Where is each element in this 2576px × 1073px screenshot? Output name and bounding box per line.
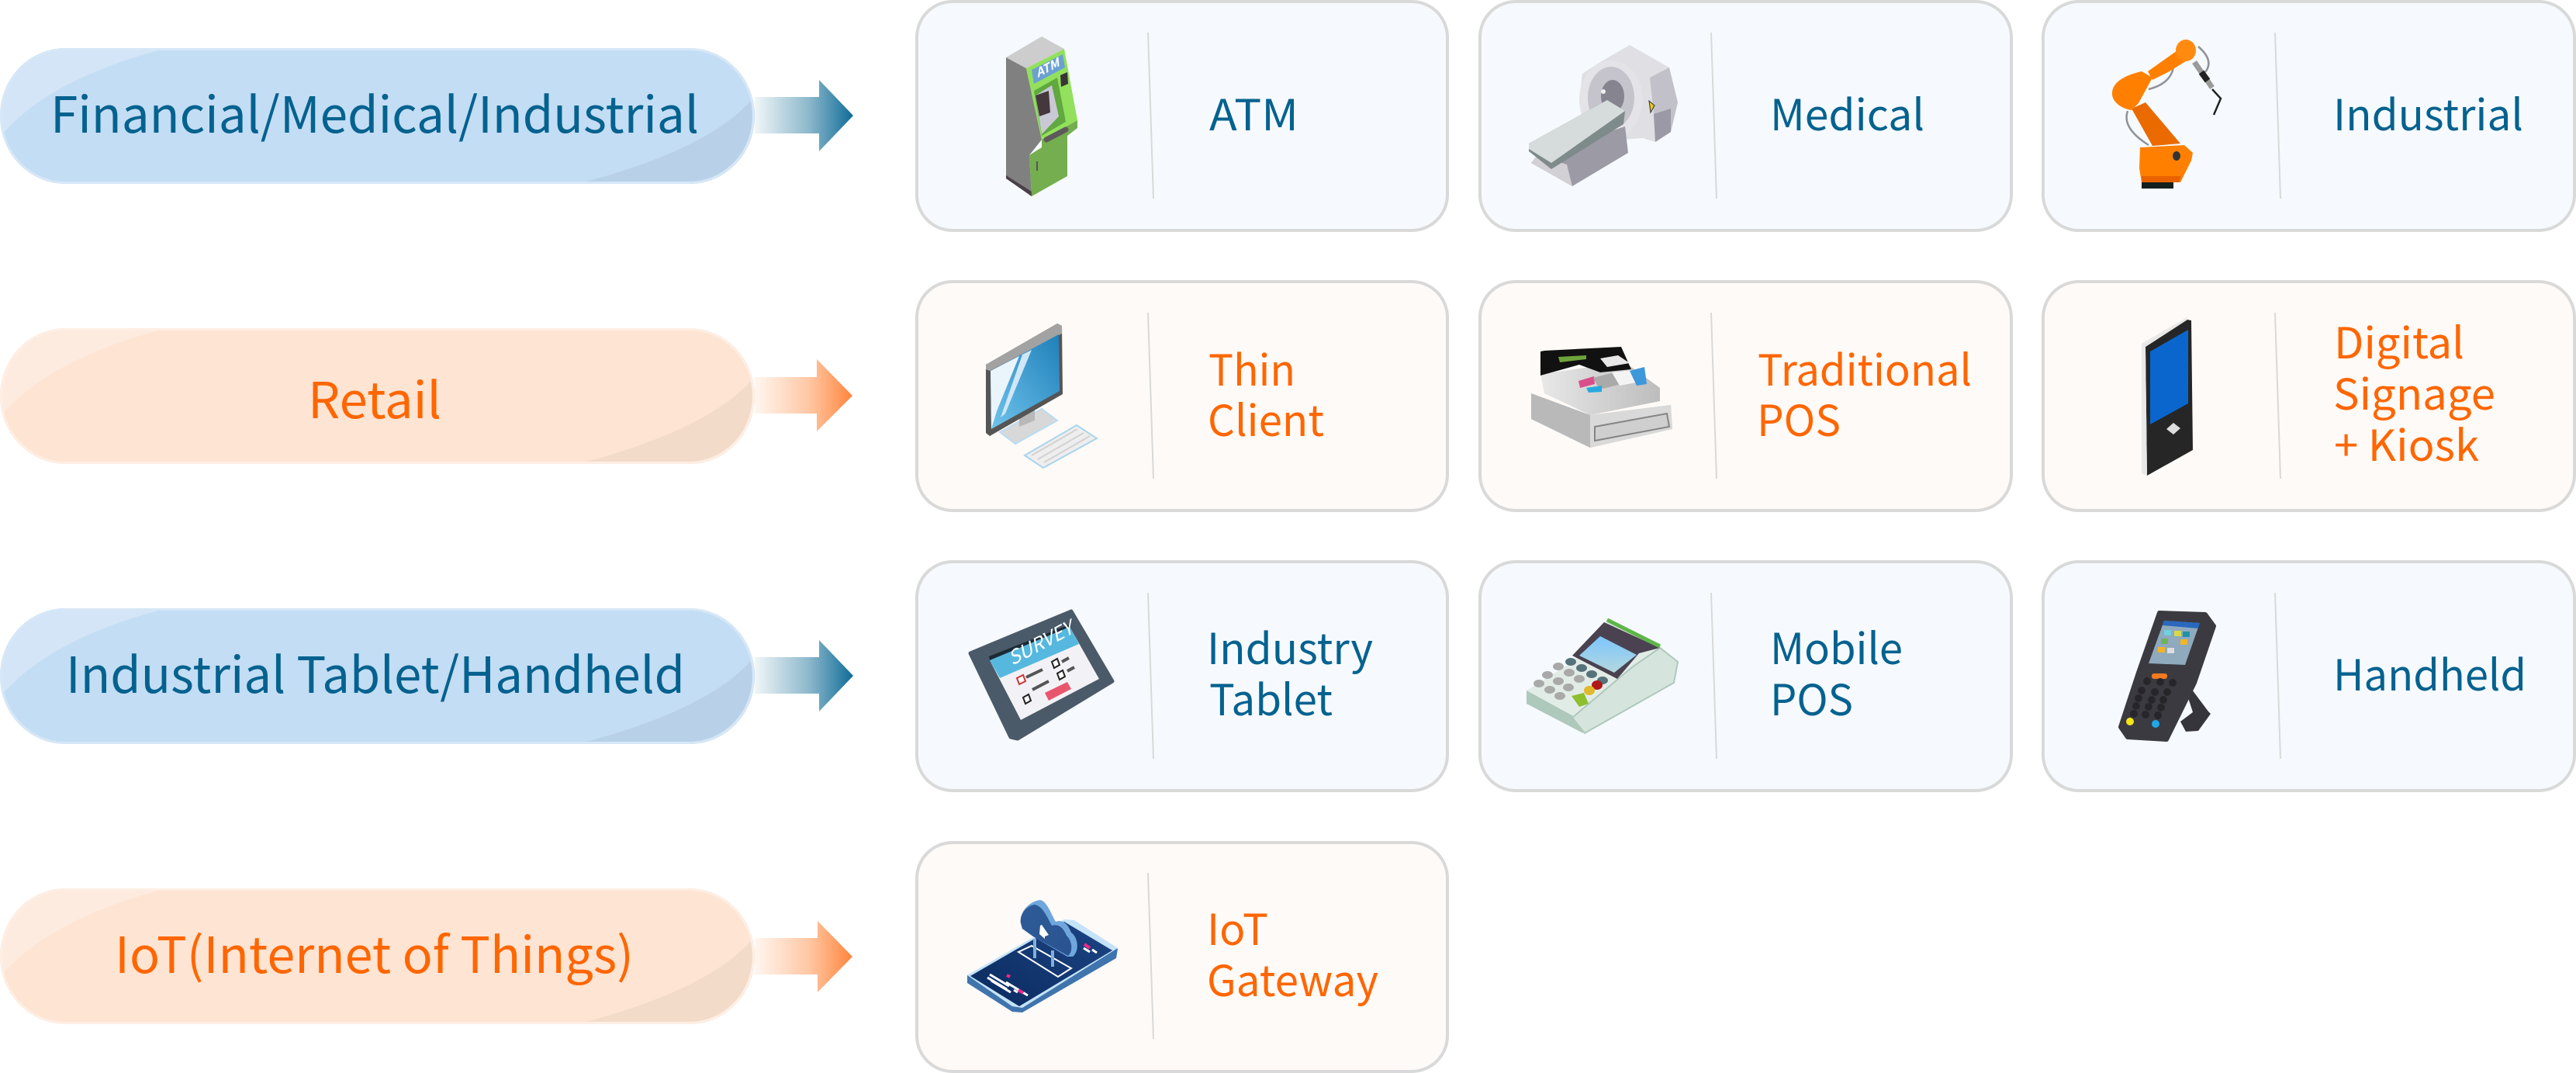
category pill: Industrial Tablet/Handheld: Industrial Tablet/Handheld <box>66 636 685 708</box>
category pill: Financial/Medical/Industrial <box>0 48 755 184</box>
arrow: row 2 <box>755 359 852 431</box>
label: Mobile POS <box>1770 614 1903 728</box>
arrow: row 4 <box>755 921 852 992</box>
icon: survey tablet <box>970 611 1112 739</box>
category pill: Retail: Retail <box>308 362 441 433</box>
card: Mobile POS <box>1480 562 2011 791</box>
card: Thin Client <box>917 282 1447 511</box>
category pill: IoT(Internet of Things) <box>0 888 755 1024</box>
label: Digital Signage + Kiosk <box>2333 309 2495 473</box>
arrow: row 3 <box>755 640 853 711</box>
category pill: Retail <box>0 328 755 464</box>
label: IoT Gateway <box>1207 895 1378 1009</box>
icon: mobile POS terminal <box>1527 620 1678 733</box>
label: Mobile POS: POS <box>1770 666 1853 728</box>
label: Industry Tablet <box>1207 614 1373 728</box>
label: Traditional POS <box>1757 336 1972 448</box>
category pill: IoT(Internet of Things): IoT(Internet of Things) <box>115 916 634 988</box>
label: Thin Client: Client <box>1208 386 1324 448</box>
category pill: Financial/Medical/Industrial: Financial/Medical/Industrial <box>50 76 699 147</box>
label: Digital Signage + Kiosk: + Kiosk <box>2334 411 2479 473</box>
card: Industry Tablet <box>917 562 1447 791</box>
label: Digital Signage + Kiosk: Signage <box>2333 360 2495 422</box>
icon: cash register <box>1531 347 1672 448</box>
label: Traditional POS: POS <box>1757 386 1841 448</box>
label: Thin Client <box>1208 336 1324 448</box>
card: ATM <box>917 2 1447 230</box>
card: Traditional POS <box>1480 282 2011 511</box>
label: Traditional POS: Traditional <box>1758 336 1972 398</box>
card: Industrial: Industrial <box>2333 81 2523 143</box>
icon: ATM machine <box>1006 36 1077 196</box>
label: Digital Signage + Kiosk: Digital <box>2334 309 2464 371</box>
label: IoT Gateway: IoT <box>1207 895 1268 957</box>
arrow: row 1 <box>755 80 853 151</box>
label: Mobile POS: Mobile <box>1770 614 1903 677</box>
icon: ATM machine: ATM <box>1036 51 1060 81</box>
icon: robot arm <box>2112 40 2221 189</box>
card: ATM: ATM <box>1209 81 1298 143</box>
card: Medical <box>1480 2 2011 230</box>
card: Digital Signage + Kiosk <box>2043 282 2574 511</box>
icon: kiosk <box>2142 317 2193 476</box>
icon: survey tablet: SURVEY <box>1008 611 1076 672</box>
icon: CT scanner <box>1529 45 1678 186</box>
label: IoT Gateway: Gateway <box>1207 947 1378 1009</box>
icon: handheld scanner <box>2121 613 2214 739</box>
card: IoT Gateway <box>917 843 1447 1071</box>
card: Industrial <box>2043 2 2574 230</box>
card: Medical: Medical <box>1770 81 1924 143</box>
card: Handheld <box>2043 562 2574 791</box>
card: Handheld: Handheld <box>2333 641 2526 703</box>
category pill: Industrial Tablet/Handheld <box>0 608 755 744</box>
icon: phone with cloud <box>967 900 1118 1012</box>
label: Industry Tablet: Industry <box>1207 614 1373 677</box>
icon: monitor and keyboard <box>986 324 1097 468</box>
label: Industry Tablet: Tablet <box>1209 666 1333 728</box>
label: Thin Client: Thin <box>1208 336 1295 398</box>
